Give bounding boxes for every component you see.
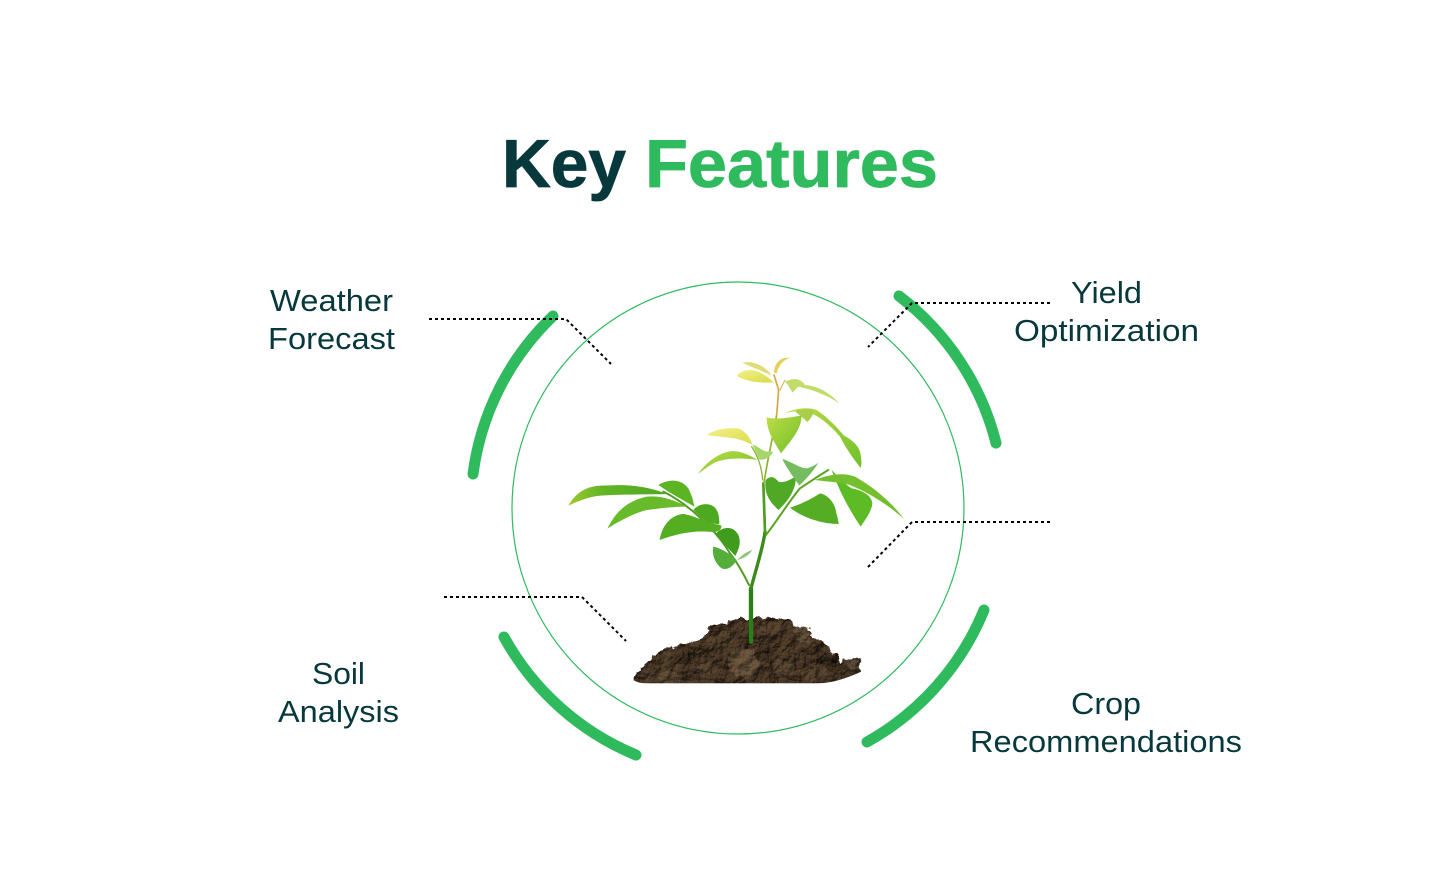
infographic canvas — [270, 140, 1241, 760]
central thin circle — [512, 282, 964, 734]
left leaves — [568, 481, 752, 569]
arc: soil analysis — [504, 637, 636, 755]
title: Key — [502, 126, 626, 202]
label: soil analysis — [278, 656, 399, 729]
leader line: yield optimization — [868, 303, 1050, 347]
title — [502, 126, 938, 202]
label: crop recommendations: Recommendations — [970, 724, 1242, 759]
label: crop recommendations: Crop — [1071, 686, 1141, 721]
plant illustration — [568, 358, 904, 687]
leader line: weather forecast — [429, 319, 611, 364]
label: yield optimization: Yield — [1071, 275, 1142, 310]
label: yield optimization — [1014, 275, 1199, 348]
label: soil analysis: Analysis — [278, 694, 399, 729]
label: soil analysis: Soil — [312, 656, 365, 691]
leader line: crop recommendations — [868, 522, 1050, 567]
label: weather forecast: Forecast — [268, 321, 395, 356]
soil mound — [633, 617, 865, 687]
arc: yield optimization — [899, 296, 996, 443]
arc: crop recommendations — [867, 610, 984, 742]
right leaves — [767, 408, 904, 527]
stems — [663, 375, 828, 642]
leader line: soil analysis — [444, 597, 626, 641]
label: yield optimization: Optimization — [1014, 313, 1199, 348]
arc: weather forecast — [473, 316, 553, 474]
top yellow leaves — [737, 358, 839, 403]
label: crop recommendations — [970, 686, 1242, 759]
middle leaves — [698, 428, 839, 524]
title: Features — [645, 126, 938, 202]
label: weather forecast — [268, 283, 395, 356]
label: weather forecast: Weather — [270, 283, 393, 318]
